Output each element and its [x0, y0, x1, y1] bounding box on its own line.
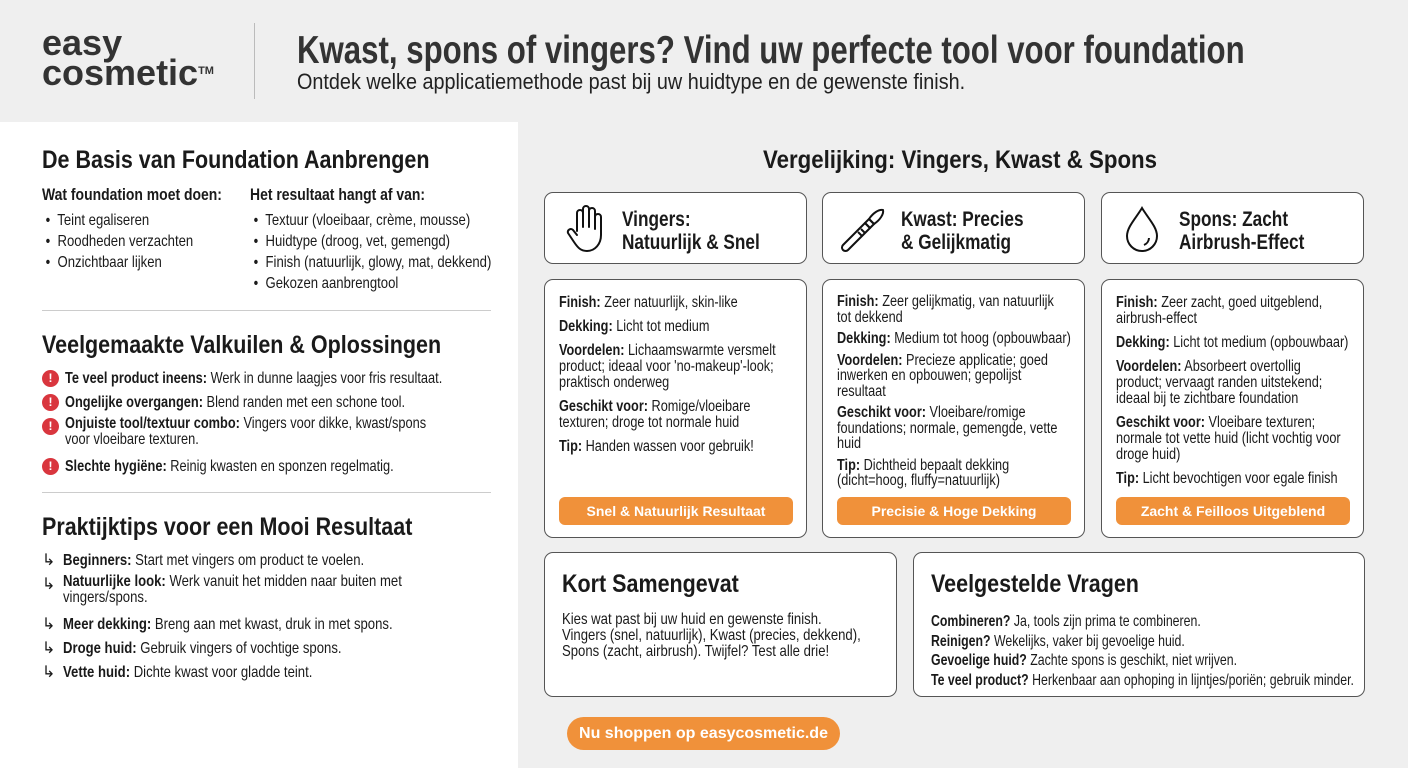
card body: vingers: Finish: Zeer natuurlijk, skin-like — [559, 294, 738, 311]
subtitle: Ontdek welke applicatiemethode past bij uw huidtype en de gewenste finish. — [297, 69, 965, 94]
card body: kwast: huid — [837, 435, 861, 452]
card header: vingers — [544, 192, 807, 264]
header — [0, 0, 1408, 122]
card body: spons: Voordelen: Absorbeert overtollig — [1116, 358, 1301, 375]
card body: kwast — [822, 279, 1085, 538]
card body: spons: product; vervaagt randen uitstekend; — [1116, 374, 1322, 391]
list: tips: Vette huid: Dichte kwast voor gladde teint. — [63, 664, 312, 681]
card body: kwast: Dekking: Medium tot hoog (opbouwbaar) — [837, 330, 1071, 347]
card body: vingers: Tip: Handen wassen voor gebruik! — [559, 438, 754, 455]
card body: kwast: foundations; normale, gemengde, vette — [837, 420, 1057, 436]
panel: samenvatting: Spons (zacht, airbrush). Twijfel? Test alle drie! — [562, 643, 829, 660]
list: wat foundation: Wat foundation moet doen: — [42, 185, 222, 204]
text: kwast title: & Gelijkmatig — [901, 231, 1011, 254]
card body: kwast: inwerken en opbouwen; gepolijst — [837, 367, 1021, 384]
logo — [42, 22, 214, 93]
list: resultaat: • Huidtype (droog, vet, gemengd) — [254, 233, 450, 250]
card body: spons: Dekking: Licht tot medium (opbouwbaar) — [1116, 334, 1348, 351]
logo: easy — [42, 22, 122, 63]
text: spons title — [1179, 208, 1304, 254]
panel: left — [0, 122, 518, 768]
card body: kwast: (dicht=hoog, fluffy=natuurlijk) — [837, 472, 1000, 489]
panel: faq — [913, 552, 1365, 697]
icon: drop — [1126, 206, 1158, 252]
list: valkuilen: ! — [48, 371, 52, 385]
card body: vingers: Geschikt voor: Romige/vloeibare — [559, 398, 750, 415]
list: resultaat: • Finish (natuurlijk, glowy, mat, dekkend) — [254, 254, 491, 271]
button: vingers: Snel & Natuurlijk Resultaat — [587, 503, 765, 519]
logo: cosmeticTM — [42, 52, 214, 93]
panel: samenvatting: Kies wat past bij uw huid en gewenste finish. — [562, 611, 822, 628]
text: spons title: Airbrush-Effect — [1179, 231, 1304, 254]
icon: hand — [566, 205, 602, 252]
card body: spons: Tip: Licht bevochtigen voor egale finish — [1116, 470, 1338, 487]
card body: vingers — [544, 279, 807, 538]
card body: kwast: tot dekkend — [837, 308, 903, 326]
card header: spons — [1101, 192, 1364, 264]
list: tips: Droge huid: Gebruik vingers of vochtige spons. — [63, 640, 342, 657]
heading: praktijktips: Praktijktips voor een Mooi Resultaat — [42, 513, 412, 541]
button: spons — [1116, 497, 1350, 525]
list: valkuilen — [42, 370, 442, 475]
heading: vergelijking: Vergelijking: Vingers, Kwast & Spons — [763, 146, 1157, 174]
button: shop: Nu shoppen op easycosmetic.de — [579, 725, 828, 742]
card body: kwast: Geschikt voor: Vloeibare/romige — [837, 404, 1026, 421]
title: Kwast, spons of vingers? Vind uw perfecte tool voor foundation — [297, 29, 1245, 72]
list: resultaat: • Gekozen aanbrengtool — [254, 275, 398, 292]
card body: spons — [1101, 279, 1364, 538]
card body: vingers: product; ideaal voor 'no-makeup'-look; — [559, 358, 774, 375]
card body: spons: airbrush-effect — [1116, 310, 1197, 327]
button: shop — [567, 717, 840, 750]
icon: brush — [841, 208, 884, 252]
card body: kwast: Tip: Dichtheid bepaalt dekking — [837, 456, 1009, 474]
panel: samenvatting: Vingers (snel, natuurlijk), Kwast (precies, dekkend), — [562, 627, 861, 644]
list: resultaat — [250, 185, 491, 292]
list: tips: vingers/spons. — [63, 589, 148, 606]
list: wat foundation: • Teint egaliseren — [46, 212, 149, 229]
list: valkuilen: ! — [48, 459, 52, 473]
list: tips: ↳ — [42, 664, 55, 681]
list: valkuilen: ! — [48, 419, 52, 433]
card body: spons: ideaal bij te zichtbare foundation — [1116, 390, 1298, 407]
text: spons title: Spons: Zacht — [1179, 208, 1288, 231]
list: wat foundation — [42, 185, 222, 271]
list: resultaat: Het resultaat hangt af van: — [250, 185, 425, 204]
list: tips: ↳ — [42, 552, 55, 569]
card header: kwast — [822, 192, 1085, 264]
list: valkuilen: voor vloeibare texturen. — [65, 431, 199, 448]
button: kwast — [837, 497, 1071, 525]
card body: vingers: praktisch onderweg — [559, 374, 669, 391]
text: vingers title: Natuurlijk & Snel — [622, 231, 760, 254]
list: tips: Meer dekking: Breng aan met kwast, druk in met spons. — [63, 616, 393, 633]
panel: faq: Combineren? Ja, tools zijn prima te combineren. — [931, 613, 1201, 630]
list: valkuilen: Onjuiste tool/textuur combo: Vingers voor dikke, kwast/spons — [65, 415, 426, 432]
text: vingers title: Vingers: — [622, 208, 691, 231]
list: tips: ↳ — [42, 616, 55, 633]
button: spons: Zacht & Feilloos Uitgeblend — [1141, 503, 1325, 519]
panel: faq: Te veel product? Herkenbaar aan ophoping in lijntjes/poriën; gebruik minder. — [931, 672, 1354, 688]
list: resultaat: • Textuur (vloeibaar, crème, mousse) — [254, 212, 470, 229]
card body: vingers: Dekking: Licht tot medium — [559, 318, 709, 335]
text: kwast title: Kwast: Precies — [901, 208, 1024, 231]
list: valkuilen: ! — [48, 395, 52, 409]
panel: samenvatting — [544, 552, 897, 697]
button: vingers — [559, 497, 793, 525]
heading: basis: De Basis van Foundation Aanbrengen — [42, 146, 429, 174]
list: tips: ↳ — [42, 576, 55, 593]
card body: spons: droge huid) — [1116, 446, 1180, 463]
button: kwast: Precisie & Hoge Dekking — [872, 503, 1036, 519]
panel: faq: Gevoelige huid? Zachte spons is geschikt, niet wrijven. — [931, 652, 1237, 669]
card body: kwast: resultaat — [837, 382, 886, 400]
panel: samenvatting: Kort Samengevat — [562, 570, 739, 598]
heading: valkuilen: Veelgemaakte Valkuilen & Oplossingen — [42, 331, 441, 359]
card body: spons: Finish: Zeer zacht, goed uitgeblend, — [1116, 294, 1322, 311]
list: wat foundation: • Roodheden verzachten — [46, 233, 193, 250]
panel: faq: Reinigen? Wekelijks, vaker bij gevoelige huid. — [931, 632, 1185, 650]
list: valkuilen: Te veel product ineens: Werk in dunne laagjes voor fris resultaat. — [65, 370, 442, 387]
panel: faq: Veelgestelde Vragen — [931, 570, 1139, 598]
card body: spons: Geschikt voor: Vloeibare texturen; — [1116, 414, 1315, 431]
card body: spons: normale tot vette huid (licht vochtig voor — [1116, 430, 1341, 447]
list: tips — [42, 552, 402, 681]
list: wat foundation: • Onzichtbaar lijken — [46, 254, 162, 271]
list: valkuilen: Ongelijke overgangen: Blend randen met een schone tool. — [65, 394, 405, 411]
text: vingers title — [622, 208, 760, 254]
list: tips: Natuurlijke look: Werk vanuit het midden naar buiten met — [63, 573, 402, 590]
card body: kwast: Voordelen: Precieze applicatie; goed — [837, 352, 1048, 368]
text: kwast title — [901, 208, 1024, 254]
list: tips: Beginners: Start met vingers om product te voelen. — [63, 552, 364, 569]
card body: vingers: texturen; droge tot normale huid — [559, 414, 739, 431]
list: tips: ↳ — [42, 640, 55, 657]
card body: kwast: Finish: Zeer gelijkmatig, van natuurlijk — [837, 293, 1054, 310]
list: valkuilen: Slechte hygiëne: Reinig kwasten en sponzen regelmatig. — [65, 458, 394, 475]
card body: vingers: Voordelen: Lichaamswarmte versmelt — [559, 342, 776, 359]
